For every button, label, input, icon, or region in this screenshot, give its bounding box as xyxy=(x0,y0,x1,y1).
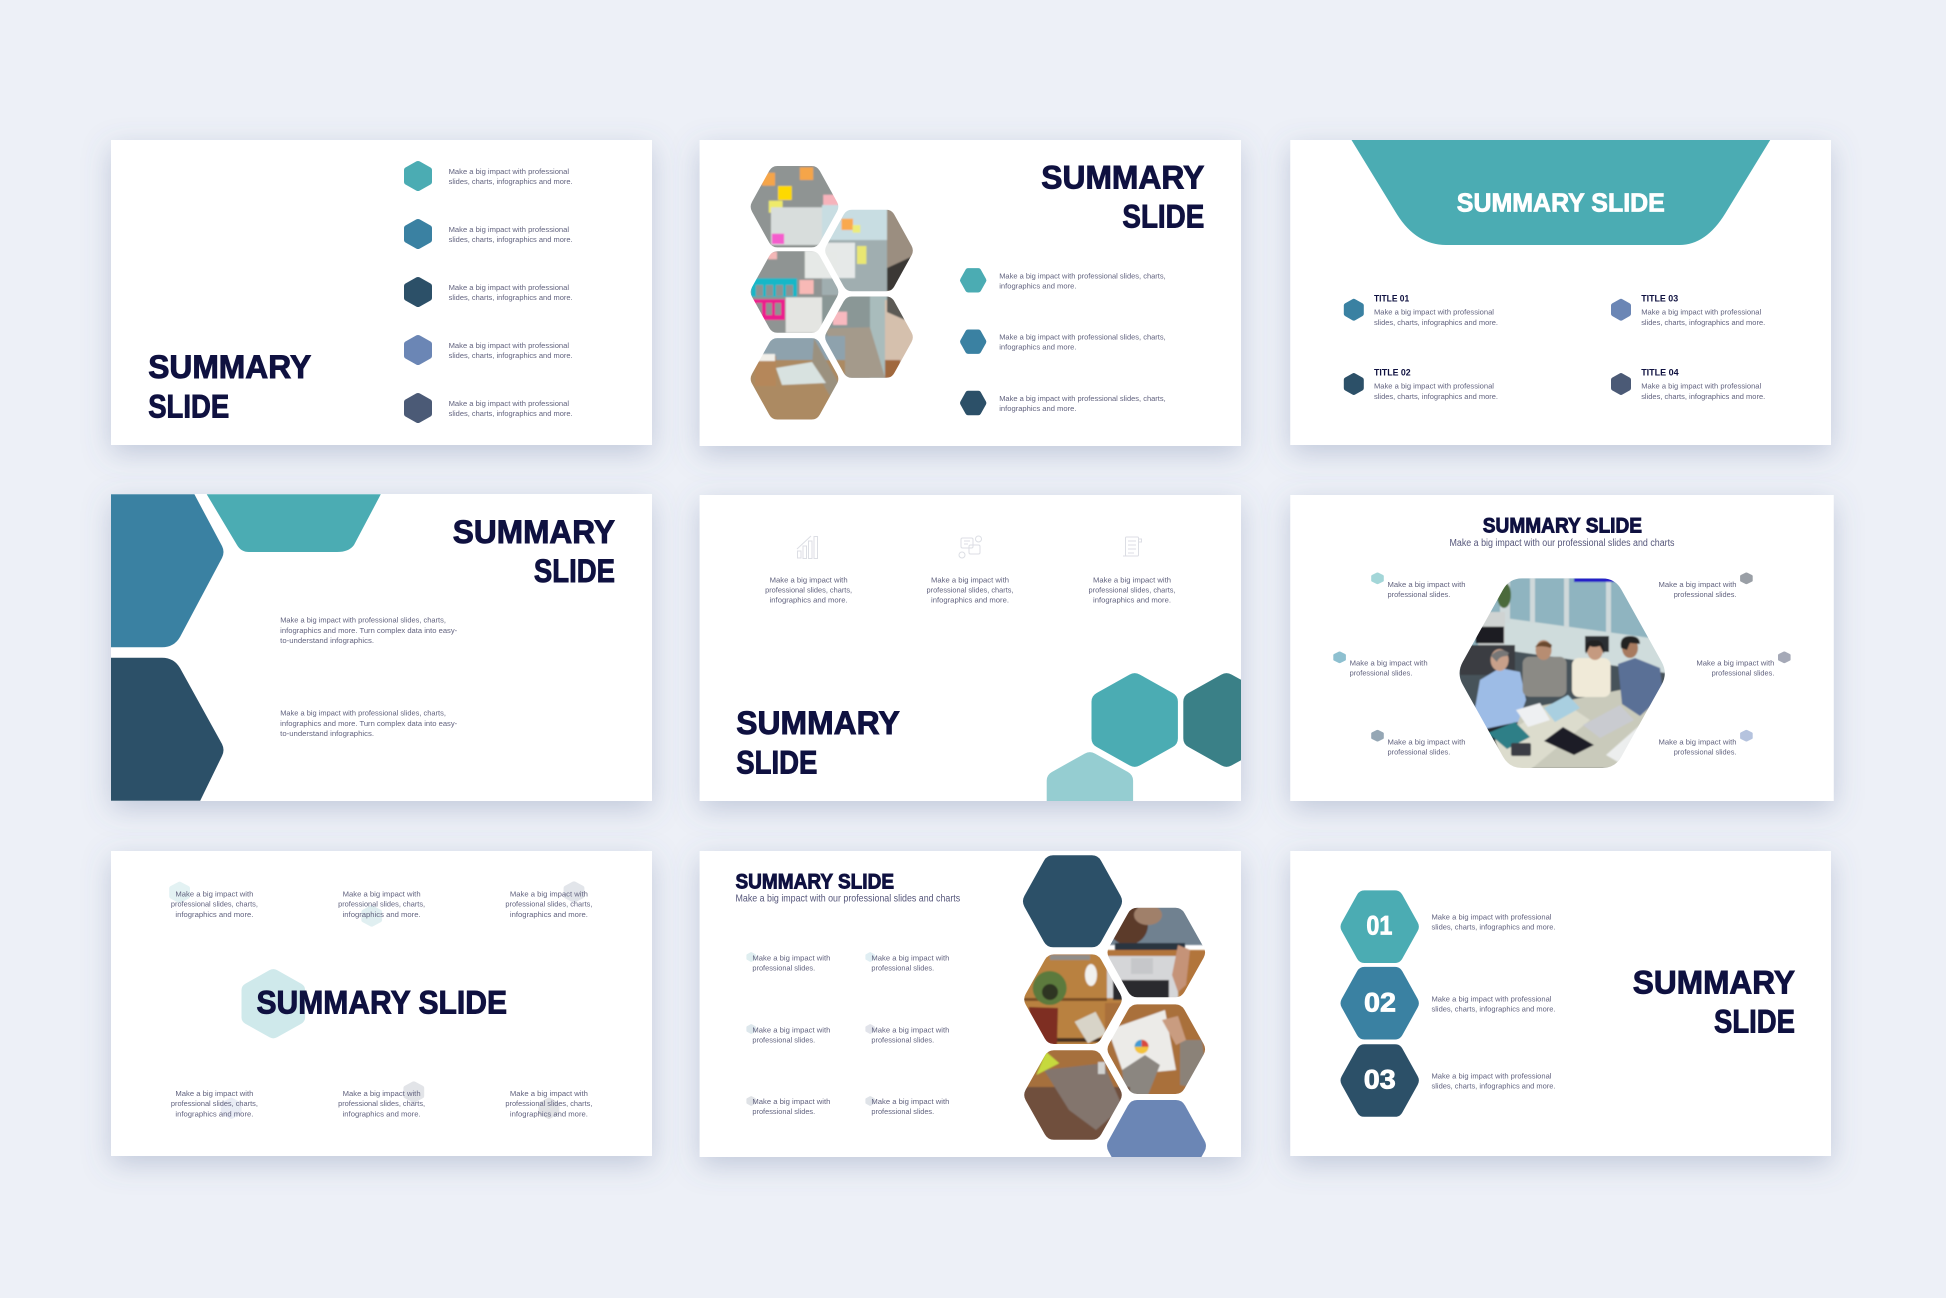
image: desk photo in hexagons xyxy=(1020,905,1210,1145)
text: six labels: professional slides. xyxy=(871,1035,934,1044)
icon: chat bubbles xyxy=(959,536,982,558)
item: title 02: slides, charts, infographics and more. xyxy=(1374,392,1498,401)
list: slide 2 items: Make a big impact with professional slides, charts, xyxy=(999,394,1166,403)
text: bottom row: Make a big impact with xyxy=(510,1089,588,1098)
heading: slide 3 title: SUMMARY SLIDE xyxy=(1457,188,1665,218)
panel: slide 8 desk photo hexagons xyxy=(700,851,1241,1192)
list: slide 1 items: slides, charts, infographics and more. xyxy=(449,409,573,418)
panel: slide 6 central meeting photo xyxy=(1290,495,1834,801)
list: slide 2 items: infographics and more. xyxy=(999,404,1076,413)
item: number 01: 01 xyxy=(1366,910,1392,940)
text: bottom row: professional slides, charts, xyxy=(505,1099,592,1108)
text block: lower description: to-understand infographics. xyxy=(280,729,374,738)
text: bottom row: professional slides, charts, xyxy=(338,1099,425,1108)
text: top row: Make a big impact with xyxy=(343,890,421,899)
list: slide 1 items: slides, charts, infographics and more. xyxy=(449,235,573,244)
shape: dark hexagon xyxy=(1023,855,1122,947)
list: slide 2 items xyxy=(960,268,1166,415)
item: number 03: Make a big impact with professional xyxy=(1432,1071,1552,1080)
item: title 01 xyxy=(1344,293,1498,327)
text: six labels xyxy=(752,953,949,1116)
list: slide 1 items xyxy=(404,161,573,423)
text block: lower description xyxy=(280,709,458,738)
heading: slide 4 title xyxy=(453,514,615,589)
icon: checklist scroll xyxy=(1123,537,1142,556)
heading: slide 6 title: SUMMARY SLIDE xyxy=(1483,514,1642,537)
item: number 01 xyxy=(1341,890,1556,963)
list: slide 1 items: Make a big impact with professional xyxy=(449,341,569,350)
text block: upper description: Make a big impact with professional slides, charts, xyxy=(280,616,446,625)
text: six labels: professional slides. xyxy=(752,1035,815,1044)
panel: slide 9 numbered hexagons xyxy=(1290,851,1831,1156)
heading: slide 4 title: SUMMARY xyxy=(453,514,615,550)
list: slide 1 items: slides, charts, infographics and more. xyxy=(449,351,573,360)
panel: slide 3 teal header with four titles xyxy=(1290,140,1831,445)
panel: slide 5 icons with corner hexagons xyxy=(700,495,1270,846)
panel: slide 4 large edge hexagons xyxy=(111,494,652,801)
text: left labels xyxy=(1350,580,1466,757)
item: number 01: Make a big impact with professional xyxy=(1432,912,1552,921)
text: top row: professional slides, charts, xyxy=(171,900,258,909)
text: bottom row xyxy=(171,1089,592,1118)
text: bottom row: professional slides, charts, xyxy=(171,1099,258,1108)
text block: upper description: to-understand infographics. xyxy=(280,636,374,645)
item: title 04: Make a big impact with professional xyxy=(1641,382,1762,391)
text: six labels: professional slides. xyxy=(871,1107,934,1116)
list: slide 1 items: Make a big impact with professional xyxy=(449,167,569,176)
text: column 2 xyxy=(926,575,1014,605)
subtitle: slide 6: Make a big impact with our professional slides and charts xyxy=(1450,538,1674,549)
text: bottom row: infographics and more. xyxy=(343,1109,421,1118)
text: column 1: infographics and more. xyxy=(770,596,848,605)
text: left labels: professional slides. xyxy=(1388,748,1450,757)
shapes: faint hexagons xyxy=(169,881,584,1119)
item: number 02: slides, charts, infographics and more. xyxy=(1432,1005,1556,1014)
text: column 3: professional slides, charts, xyxy=(1088,585,1176,594)
list: slide 2 items: infographics and more. xyxy=(999,343,1076,352)
item: title 03: Make a big impact with professional xyxy=(1641,308,1762,317)
item: title 01: slides, charts, infographics and more. xyxy=(1374,318,1498,327)
image: meeting photo in hexagon xyxy=(1460,578,1665,768)
heading: slide 7 title: SUMMARY SLIDE xyxy=(256,984,507,1020)
text block: lower description: infographics and more. Turn complex data into easy- xyxy=(280,719,458,728)
text: left labels: Make a big impact with xyxy=(1350,659,1428,668)
panel: slide 1 hexagon list xyxy=(111,140,652,445)
text: left labels: Make a big impact with xyxy=(1388,738,1466,747)
text: six labels: Make a big impact with xyxy=(871,1025,949,1034)
item: title 03: TITLE 03 xyxy=(1641,293,1678,304)
item: title 01: Make a big impact with professional xyxy=(1374,308,1494,317)
item: title 01: TITLE 01 xyxy=(1374,293,1410,304)
shape: teal trapezoid xyxy=(207,494,381,552)
heading: slide 9 title xyxy=(1633,964,1795,1040)
text: top row: infographics and more. xyxy=(343,910,421,919)
item: number 03: slides, charts, infographics and more. xyxy=(1432,1081,1556,1090)
item: title 04: slides, charts, infographics and more. xyxy=(1641,392,1765,401)
panel: slide 7 centered title xyxy=(111,851,652,1156)
text: six labels: professional slides. xyxy=(871,963,934,972)
text: left labels: professional slides. xyxy=(1388,590,1450,599)
heading: slide 1 title xyxy=(148,349,311,425)
heading: slide 1 title: SLIDE xyxy=(148,389,229,425)
text: six labels: Make a big impact with xyxy=(871,1097,949,1106)
image: sticky notes photo in hexagons xyxy=(750,166,913,420)
text: left labels: Make a big impact with xyxy=(1388,580,1466,589)
subtitle: slide 8: Make a big impact with our professional slides and charts xyxy=(736,894,960,905)
heading: slide 9 title: SLIDE xyxy=(1714,1004,1795,1040)
heading: slide 4 title: SLIDE xyxy=(534,553,615,589)
text: column 3: Make a big impact with xyxy=(1093,575,1171,584)
text: top row: professional slides, charts, xyxy=(505,900,592,909)
item: title 04: TITLE 04 xyxy=(1641,368,1679,379)
text: top row: professional slides, charts, xyxy=(338,900,425,909)
text: six labels: professional slides. xyxy=(752,963,815,972)
text block: lower description: Make a big impact with professional slides, charts, xyxy=(280,709,446,718)
list: slide 2 items: Make a big impact with professional slides, charts, xyxy=(999,271,1166,280)
list: slide 2 items: infographics and more. xyxy=(999,281,1076,290)
text: top row: Make a big impact with xyxy=(175,890,253,899)
list: slide 2 items: Make a big impact with professional slides, charts, xyxy=(999,333,1166,342)
list: slide 1 items: slides, charts, infographics and more. xyxy=(449,177,573,186)
text: six labels: Make a big impact with xyxy=(752,953,830,962)
item: title 02: TITLE 02 xyxy=(1374,368,1411,379)
text: right labels: professional slides. xyxy=(1712,669,1774,678)
text: top row: infographics and more. xyxy=(175,910,253,919)
text: bottom row: infographics and more. xyxy=(510,1109,588,1118)
item: title 03: slides, charts, infographics and more. xyxy=(1641,318,1765,327)
heading: slide 9 title: SUMMARY xyxy=(1633,964,1795,1000)
list: slide 1 items: slides, charts, infographics and more. xyxy=(449,293,573,302)
shape: dark half hexagon xyxy=(111,658,224,801)
text: column 1: professional slides, charts, xyxy=(765,585,852,594)
text: column 1 xyxy=(765,575,852,605)
text: column 2: infographics and more. xyxy=(931,596,1009,605)
item: title 03 xyxy=(1611,293,1765,327)
heading: slide 2 title xyxy=(1041,159,1204,234)
text: six labels: Make a big impact with xyxy=(871,953,949,962)
markers: faint small hexagons xyxy=(746,952,875,1106)
text: right labels: Make a big impact with xyxy=(1658,580,1736,589)
markers: six small hexagons xyxy=(1333,572,1791,742)
text: six labels: professional slides. xyxy=(752,1107,815,1116)
text: top row xyxy=(171,890,592,919)
text: column 3 xyxy=(1088,575,1176,605)
text: top row: infographics and more. xyxy=(510,910,588,919)
item: number 02: 02 xyxy=(1364,987,1396,1017)
text: bottom row: Make a big impact with xyxy=(343,1089,421,1098)
item: number 02: Make a big impact with professional xyxy=(1432,995,1552,1004)
heading: slide 5 title: SLIDE xyxy=(736,744,817,780)
heading: slide 5 title xyxy=(736,705,900,780)
text: right labels xyxy=(1658,580,1774,757)
text: top row: Make a big impact with xyxy=(510,890,588,899)
item: title 04 xyxy=(1611,368,1765,401)
banner: slide 3 teal trapezoid xyxy=(1352,140,1770,245)
item: number 03: 03 xyxy=(1364,1064,1396,1094)
text block: upper description: infographics and more. Turn complex data into easy- xyxy=(280,626,458,635)
heading: slide 2 title: SLIDE xyxy=(1122,198,1204,234)
list: slide 1 items: Make a big impact with professional xyxy=(449,399,569,408)
item: title 02: Make a big impact with professional xyxy=(1374,382,1494,391)
heading: slide 2 title: SUMMARY xyxy=(1041,159,1204,195)
heading: slide 5 title: SUMMARY xyxy=(736,705,900,741)
text: left labels: professional slides. xyxy=(1350,669,1412,678)
list: slide 1 items: Make a big impact with professional xyxy=(449,283,569,292)
text: column 1: Make a big impact with xyxy=(770,575,848,584)
shapes: corner hexagon cluster xyxy=(1046,673,1241,801)
item: number 02 xyxy=(1341,967,1556,1040)
item: number 01: slides, charts, infographics and more. xyxy=(1432,922,1556,931)
text: column 3: infographics and more. xyxy=(1093,596,1171,605)
shape: periwinkle hexagon cut by slide edge xyxy=(1107,1100,1206,1157)
text: column 2: professional slides, charts, xyxy=(926,585,1014,594)
text: right labels: Make a big impact with xyxy=(1658,738,1736,747)
list: slide 1 items: Make a big impact with professional xyxy=(449,225,569,234)
icon: rising bar chart xyxy=(797,536,818,558)
item: number 03 xyxy=(1341,1044,1556,1117)
text: column 2: Make a big impact with xyxy=(931,575,1009,584)
text: right labels: Make a big impact with xyxy=(1696,659,1774,668)
text: bottom row: infographics and more. xyxy=(175,1109,253,1118)
heading: slide 8 title: SUMMARY SLIDE xyxy=(736,870,894,893)
text: bottom row: Make a big impact with xyxy=(175,1089,253,1098)
shape: blue half hexagon xyxy=(111,494,224,647)
panel: slide 2 photo hexagons xyxy=(700,140,1241,446)
text block: upper description xyxy=(280,616,458,645)
text: six labels: Make a big impact with xyxy=(752,1025,830,1034)
text: six labels: Make a big impact with xyxy=(752,1097,830,1106)
heading: slide 1 title: SUMMARY xyxy=(148,349,311,385)
item: title 02 xyxy=(1344,368,1498,401)
text: right labels: professional slides. xyxy=(1674,590,1736,599)
text: right labels: professional slides. xyxy=(1674,748,1736,757)
